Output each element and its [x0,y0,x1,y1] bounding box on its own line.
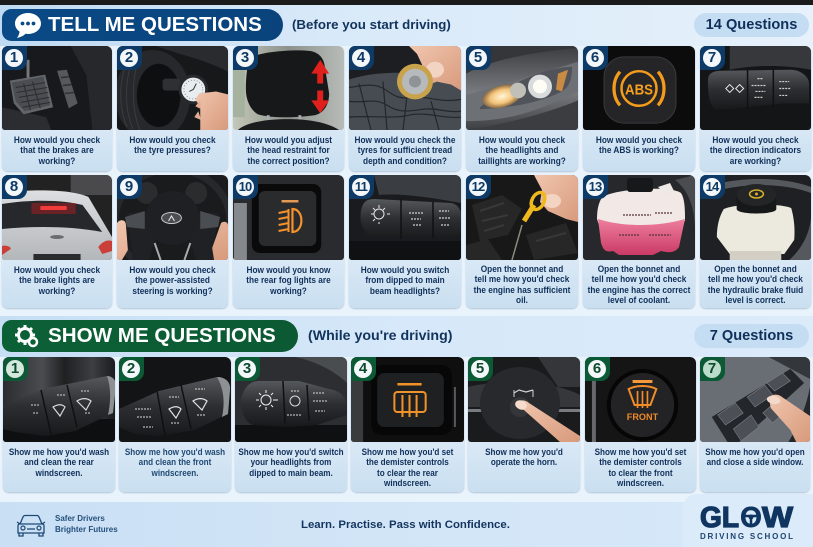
question 4: depth and condition? [363,156,447,166]
icon: car [15,514,47,538]
card 2: tyre pressures [117,46,228,171]
badge: number 6 [585,357,610,381]
question 12: oil. [516,295,528,305]
badge: number 13: 13 [589,179,601,194]
show card 5: horn [468,357,580,492]
question 1: that the brakes are [20,145,94,155]
badge: number 9 [117,175,142,199]
question 5: How would you check [479,135,565,145]
question 14: level is correct. [725,295,786,305]
badge: number 2: 2 [125,49,133,66]
question 6: How would you check [596,135,682,145]
question 5 [478,135,566,166]
badge: number 7: 7 [708,49,716,66]
image: headlight stalk [235,357,347,442]
card 11: dipped to main beam [349,175,461,308]
show card 3: headlights [235,357,347,492]
image: coin on tyre tread [349,46,461,130]
show question 6: the demister controls [599,457,682,467]
show question 1 [9,447,109,478]
card 4: tread depth [349,46,461,171]
image: dipstick [466,175,578,260]
show question 5: Show me how you'd [485,447,563,457]
badge: number 3 [233,46,258,70]
question 14: tell me how you'd check [708,274,803,284]
badge: number 1: 1 [11,360,19,377]
question 5: taillights are working? [478,156,566,166]
badge: number 5 [466,46,491,70]
question 11: How would you switch [361,265,449,275]
show question 5: operate the horn. [491,457,557,467]
badge: number 2 [119,357,144,381]
top black bar [0,0,813,5]
question 14: Open the bonnet and [714,264,797,274]
image: front demister button: FRONT [627,412,659,422]
badge: number 3 [235,357,260,381]
question 9: How would you check [129,265,216,275]
badge: number 4: 4 [357,49,365,66]
card 1: brakes [2,46,112,171]
badge: number 6: 6 [591,49,599,66]
badge: 7 questions: 7 Questions [710,328,793,344]
question 14: the hydraulic brake fluid [708,285,803,295]
question 13: level of coolant. [608,295,670,305]
question 9 [129,265,216,296]
show question 3: Show me how you'd switch [238,447,344,457]
show question 2 [125,447,225,478]
badge: number 3: 3 [243,360,251,377]
question 9: steering is working? [132,286,213,296]
question 2: How would you check [129,135,216,145]
footer tagline: safer drivers: Safer Drivers [55,514,105,523]
badge: 14 questions [694,13,809,37]
badge: number 7 [700,357,725,381]
question 10: working? [270,286,307,296]
card 3: head restraint [233,46,344,171]
image: wiper stalk [119,357,231,442]
image: front demister button [585,357,696,442]
show question 7: Show me how you'd open [705,447,805,457]
show card 4: rear demister [351,357,464,492]
image: ABS warning light [583,46,695,130]
image: rear demister button [351,357,464,442]
show question 6: to clear the front [608,468,673,478]
question 4 [355,135,456,166]
badge: number 2 [117,46,142,70]
question 9: the power-assisted [135,275,210,285]
question 12: the engine has sufficient [474,285,570,295]
show question 6: Show me how you'd set [595,447,686,457]
badge: number 5: 5 [476,360,484,377]
question 8 [14,265,100,296]
question 1: How would you check [14,135,100,145]
image: finger on horn [468,357,580,442]
question 2 [129,135,216,155]
card 10: rear fog [233,175,344,308]
show question 6: windscreen. [617,478,664,488]
card 9: power steering [117,175,228,308]
question 10: How would you know [247,265,330,275]
question 3: the correct position? [247,156,330,166]
image: ABS warning light: ABS [625,82,653,98]
footer tagline: safer drivers: Brighter Futures [55,524,118,534]
question 12 [474,264,570,305]
badge: number 2: 2 [127,360,135,377]
show question 1: windscreen. [36,468,82,478]
card 6: ABS [583,46,695,171]
badge: number 7: 7 [708,360,716,377]
badge: number 5 [468,357,493,381]
badge: number 13 [583,175,608,199]
show question 2: windscreen. [152,468,198,478]
footer tagline: safer drivers [55,514,118,535]
question 3: the head restraint for [247,145,330,155]
question 4: tyres for sufficient tread [358,145,452,155]
question 10 [246,265,331,296]
question 7: How would you check [712,135,799,145]
badge: number 14 [700,175,725,199]
image: fog light button [233,175,344,260]
badge: number 3: 3 [241,49,249,66]
image: pedals [2,46,112,130]
image: brake fluid reservoir [700,175,811,260]
badge: number 1 [2,46,27,70]
question 12: tell me how you'd check [475,274,569,284]
image: tyre gauge [117,46,228,130]
question 6 [596,135,682,155]
badge: number 14: 14 [706,179,718,194]
badge: number 1: 1 [10,49,18,66]
logo: glow driving school: DRIVING SCHOOL [700,532,793,541]
logo: glow driving school [683,494,813,547]
image: window switches [700,357,810,442]
show question 2: Show me how you'd wash [125,447,225,457]
badge: number 8: 8 [10,178,18,195]
badge: number 12 [466,175,491,199]
question 11: beam headlights? [370,286,440,296]
icon: gears [15,325,38,348]
question 3 [245,135,332,166]
show question 3: dipped to main beam. [249,468,333,478]
show card 2: front wash [119,357,231,492]
question 11 [361,265,449,296]
badge: number 12: 12 [472,179,484,194]
show question 5 [485,447,563,467]
question 8: working? [39,286,75,296]
question 3: How would you adjust [245,135,332,145]
image: indicator stalk [700,46,811,130]
badge: number 6 [583,46,608,70]
show question 3 [238,447,344,478]
footer band [0,502,813,547]
badge: number 6: 6 [593,360,601,377]
image: head restraint with arrows [233,46,344,130]
question 1: working? [39,156,75,166]
question 7: are working? [730,156,781,166]
question 12: Open the bonnet and [481,264,563,274]
show question 3: your headlights from [251,457,331,467]
badge: number 7 [700,46,725,70]
show question 4 [362,447,454,488]
card 12: oil [466,175,578,308]
card 5: headlights [466,46,578,171]
badge: 14 questions: 14 Questions [706,17,797,33]
show question 4: Show me how you'd set [362,447,453,457]
section background: show me [0,316,813,357]
image: headlight [466,46,578,130]
question 7 [710,135,801,166]
logo: glow driving school: GL [700,502,739,534]
card 7: indicators [700,46,811,171]
logo: glow driving school: O [740,502,762,534]
image: headlight stalk [349,175,461,260]
icon: speech bubble [15,13,41,38]
show question 4: windscreen. [384,478,431,488]
show question 7 [699,447,811,468]
question 13: the engine has the correct [588,285,690,295]
badge: 7 questions [694,324,809,348]
question 5: the headlights and [486,145,558,155]
question 4: How would you check the [355,135,455,145]
question 13: Open the bonnet and [598,264,680,274]
show question 6 [584,447,697,489]
image: wiper stalk [3,357,115,442]
question 2: the tyre pressures? [134,145,211,155]
show question 4: the demister controls [366,457,449,467]
badge: number 4 [349,46,374,70]
badge: number 5: 5 [474,49,482,66]
heading: tell me questions [2,9,283,41]
show card 7: side window [700,357,810,492]
show card 6: front demister [585,357,696,492]
question 1 [14,135,100,166]
badge: number 9: 9 [125,178,133,195]
show question 7: and close a side window. [707,457,803,467]
question 6: the ABS is working? [599,145,679,155]
question 13: tell me how you'd check [592,274,686,284]
question 11: from dipped to main [365,275,445,285]
question 7: the direction indicators [710,145,801,155]
section background: tell me [0,5,813,46]
badge: number 11 [349,175,374,199]
question 13 [588,264,690,305]
question 10: the rear fog lights are [246,275,331,285]
image: rear of car [2,175,112,260]
badge: number 1 [3,357,28,381]
badge: number 10: 10 [239,179,251,194]
badge: number 10 [233,175,258,199]
heading: show me questions [2,320,298,352]
logo: glow driving school: W [762,502,794,534]
show question 1: and clean the rear [24,457,94,467]
heading: tell me questions: TELL ME QUESTIONS [48,13,262,36]
card 14: brake fluid [700,175,811,308]
badge: number 4: 4 [359,360,367,377]
heading: show me questions: SHOW ME QUESTIONS [48,324,276,347]
question 8: the brake lights are [19,275,95,285]
show question 2: and clean the front [139,457,211,467]
show question 4: to clear the rear [377,468,438,478]
subtitle: before you start driving: (Before you start driving) [292,17,451,32]
subtitle: while you're driving: (While you're driving) [308,328,452,344]
card 13: coolant [583,175,695,308]
card 8: brake lights [2,175,112,308]
question 8: How would you check [14,265,100,275]
show card 1: rear wash [3,357,115,492]
image: steering wheel with hands [117,175,228,260]
badge: number 4 [351,357,376,381]
badge: number 11: 11 [355,179,367,194]
question 14 [708,264,803,305]
image: coolant reservoir [583,175,695,260]
footer slogan: Learn. Practise. Pass with Confidence. [301,519,510,531]
show question 1: Show me how you'd wash [9,447,109,457]
badge: number 8 [2,175,27,199]
